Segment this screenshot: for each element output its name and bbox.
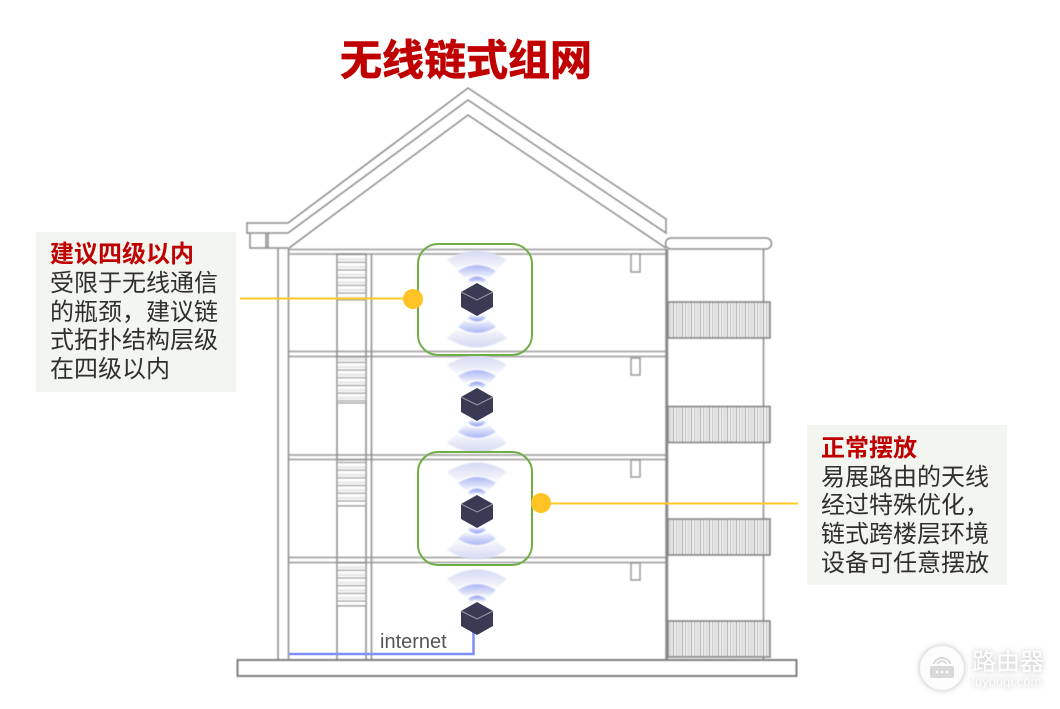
highlight box: lower <box>418 452 532 565</box>
left callout body: 在四级以内 <box>50 356 170 383</box>
title: 无线链式组网 <box>340 37 592 84</box>
icon: router logo <box>920 646 964 690</box>
router 1 <box>447 250 507 348</box>
left callout body <box>50 270 218 383</box>
watermark <box>920 646 1044 690</box>
internet cable <box>289 632 474 654</box>
router 2 <box>447 356 507 452</box>
building <box>238 88 796 676</box>
right callout body: 链式跨楼层环境 <box>821 521 989 548</box>
right wing <box>666 238 772 660</box>
watermark text: 路由器 <box>972 649 1044 676</box>
left callout body: 式拓扑结构层级 <box>50 327 218 354</box>
small windows <box>631 254 640 580</box>
right callout body: 设备可任意摆放 <box>821 550 989 577</box>
right callout heading: 正常摆放 <box>821 435 917 462</box>
panel: left callout <box>36 232 236 392</box>
right callout body: 易展路由的天线 <box>821 464 989 491</box>
panel: right callout <box>807 425 1007 585</box>
watermark domain: luyouqi.com <box>972 674 1041 689</box>
floors <box>288 250 666 562</box>
router 4 <box>447 570 507 635</box>
left callout body: 的瓶颈，建议链 <box>50 299 218 326</box>
left callout body: 受限于无线通信 <box>50 270 218 297</box>
router 3 <box>447 462 507 560</box>
left callout heading: 建议四级以内 <box>50 241 194 268</box>
connector right <box>531 493 798 513</box>
internet label: internet <box>380 631 447 653</box>
left column and stair walls <box>278 248 372 660</box>
right callout body: 经过特殊优化， <box>821 492 989 519</box>
foundation <box>238 660 796 676</box>
right callout body <box>821 464 989 577</box>
stair windows <box>337 254 366 606</box>
roof <box>247 88 666 248</box>
highlight box: top <box>418 244 532 355</box>
connector left <box>240 289 423 309</box>
